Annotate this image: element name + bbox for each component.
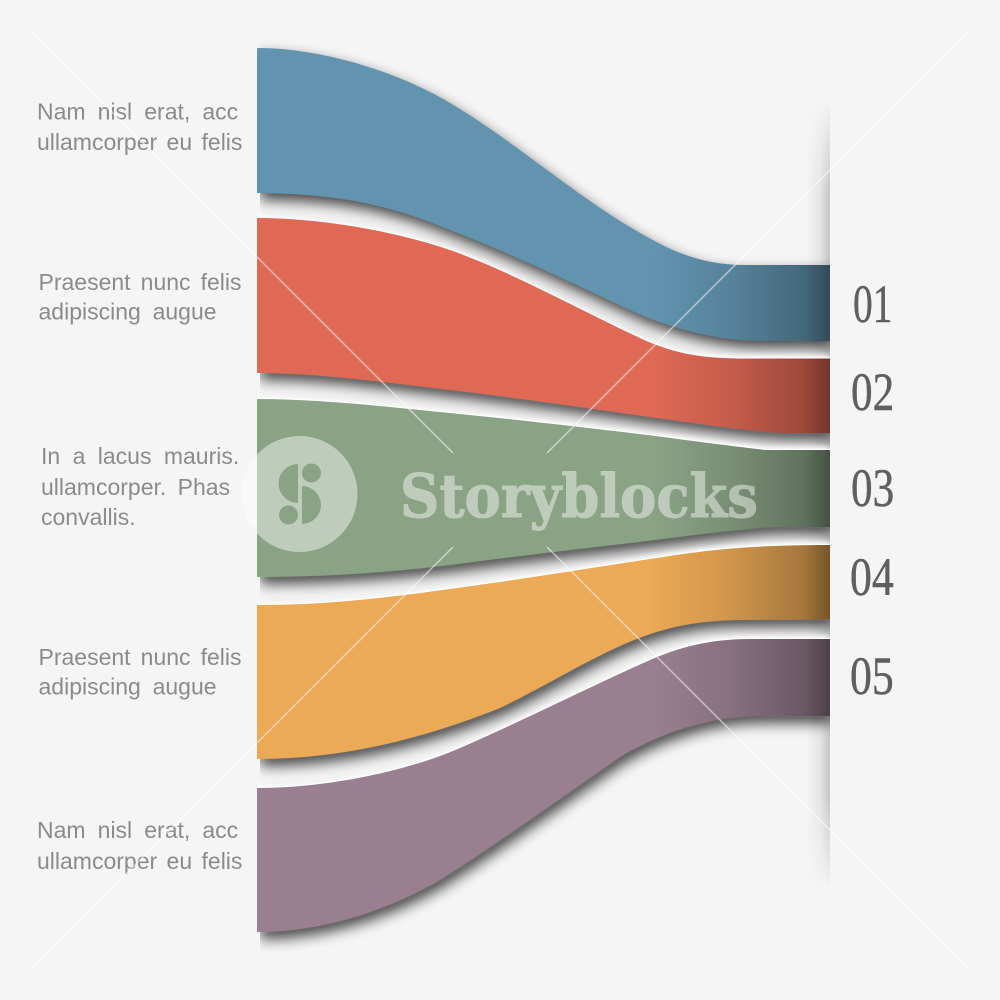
number 03: 03 (851, 457, 894, 518)
caption 4: adipiscing augue (38, 674, 217, 700)
vertical wall shadow (813, 116, 830, 874)
number 05: 05 (850, 646, 894, 706)
band 05: purple (257, 630, 833, 939)
caption 3: ullamcorper. Phas (41, 474, 230, 500)
caption 3: convallis. (41, 504, 136, 530)
band 01: blue (257, 48, 833, 350)
caption 4: Praesent nunc felis (38, 644, 242, 670)
caption 5 (37, 817, 242, 874)
watermark logo (242, 436, 358, 552)
band 03: green (257, 396, 833, 584)
caption 4 (38, 644, 242, 700)
caption 3: In a lacus mauris. (41, 443, 239, 469)
number 04: 04 (850, 547, 894, 607)
caption 1 (37, 98, 242, 155)
caption 2: adipiscing augue (38, 298, 217, 324)
band 04: orange (257, 540, 833, 766)
number 02: 02 (851, 361, 894, 422)
caption 5: Nam nisl erat, acc (37, 817, 238, 843)
caption 1: ullamcorper eu felis (37, 129, 242, 155)
caption 1: Nam nisl erat, acc (37, 98, 238, 124)
caption 2 (38, 269, 242, 324)
number 01: 01 (853, 275, 892, 335)
caption 3 (41, 443, 239, 530)
watermark wordmark: Storyblocks (400, 462, 758, 532)
caption 5: ullamcorper eu felis (37, 848, 242, 874)
band 02: red (257, 215, 833, 440)
caption 2: Praesent nunc felis (38, 269, 242, 295)
